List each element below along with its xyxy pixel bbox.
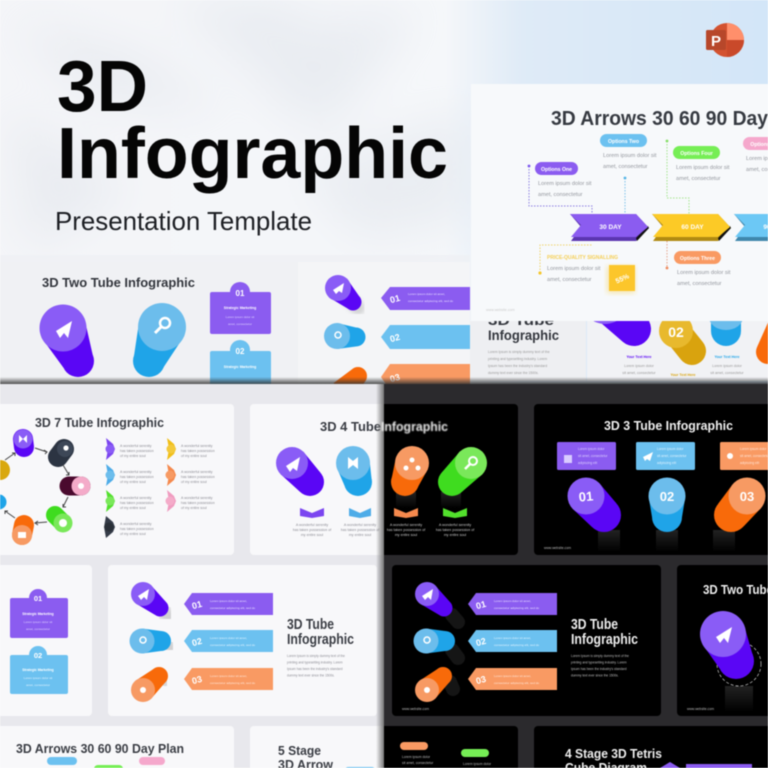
card 02 (10, 646, 68, 694)
quadrant: dark slides (381, 384, 768, 768)
title: Infographic (57, 114, 448, 194)
panel: dark arrows slide (384, 726, 518, 768)
heading: 3D Tube (287, 617, 334, 633)
tube: blue (133, 303, 186, 377)
arrow: 30 DAY (570, 214, 649, 241)
heading: 5 Stage (278, 743, 321, 758)
tube 02: 02 (660, 489, 674, 504)
panel: two tube cards (0, 565, 92, 716)
card 01: Lorem ipsum dolor sit (226, 315, 254, 319)
card 02: Lorem ipsum dolor sit (24, 676, 52, 680)
footer url: www.website.com (486, 308, 515, 312)
card 02: Strategic Marketing (22, 668, 54, 672)
panel: 3D 4 Tube dark half (381, 404, 518, 555)
bar 01: 01 (475, 599, 487, 611)
captions: my entire soul (349, 533, 371, 537)
box 2 (636, 442, 695, 470)
dashed ring (717, 642, 761, 686)
footer url: www.website.com (687, 707, 714, 711)
tube 03 (714, 478, 766, 532)
panel: 3D 7 Tube Infographic (0, 404, 234, 555)
captions: Your Text Here (626, 355, 652, 359)
bar 01 (184, 593, 273, 615)
captions (622, 355, 744, 377)
tube row 03 (415, 667, 452, 702)
paragraph: printing and typesetting industry. Lorem (287, 660, 343, 664)
box 1: Lorem ipsum dolor (578, 447, 605, 451)
bar 03: 03 (191, 674, 203, 686)
tube 01 (568, 478, 621, 532)
tube shadows (396, 492, 461, 508)
bar 02 (381, 325, 470, 349)
heading: 3D Two Tube Infographic (42, 276, 195, 290)
ribbons (300, 508, 371, 518)
arrow: 60 DAY: 60 DAY (681, 224, 704, 231)
bar 03: consectetur adipiscing elit, sed do (210, 681, 255, 685)
callouts: Lorem ipsum dolor (402, 755, 431, 759)
bar 02: consectetur adipiscing elit, sed do (494, 643, 539, 647)
paragraph (287, 654, 345, 678)
tube 03: 03 (740, 489, 754, 504)
bar 02 (468, 630, 557, 652)
tube row 03 (131, 667, 168, 702)
captions: has taken possession of (341, 528, 379, 532)
callout: Options Three: Lorem ipsum dolor sit (677, 270, 731, 276)
captions: has taken possession of (293, 528, 331, 532)
card 02 (209, 339, 272, 384)
callout: price quality signalling: 55% (615, 273, 631, 285)
callout: Options Three (674, 251, 731, 287)
legend text: of my entire soul (120, 454, 146, 458)
title: 3D (57, 47, 148, 127)
arrow: 30 DAY: 30 DAY (599, 224, 622, 231)
captions: my entire soul (301, 533, 323, 537)
card 01 (10, 589, 68, 638)
panel: 3D 4 Tube light half (250, 404, 390, 555)
card 01 (210, 282, 271, 334)
tube fragments: 02 (668, 324, 684, 340)
bar 01: consectetur adipiscing elit, sed do (408, 299, 453, 303)
panel: 3D Two Tube dark (677, 565, 768, 716)
legend text: of my entire soul (181, 506, 207, 510)
paragraph: printing and typesetting industry. Lorem (488, 357, 547, 361)
heading: 3D Tube (571, 617, 618, 633)
callout: price quality signalling: PRICE-QUALITY SIGNALLING (547, 255, 618, 261)
captions: my entire soul (395, 533, 417, 537)
bar 03: consectetur adipiscing elit, sed do (494, 681, 539, 685)
bar 02: 02 (389, 332, 401, 344)
paragraph: Lorem Ipsum is simply dummy text of the (488, 350, 550, 354)
slide: 3D two tube (top left) (38, 274, 471, 384)
legend text: has taken possession (181, 449, 215, 453)
tube (700, 611, 754, 679)
legend text: of my entire soul (181, 480, 207, 484)
box 1: sit amet, consectetur (578, 454, 608, 458)
legend text: of my entire soul (120, 532, 146, 536)
captions: A wonderful serenity (390, 523, 422, 527)
captions: Lorem ipsum dolor (712, 364, 743, 368)
callouts: Lorem ipsum dolor (463, 762, 492, 766)
bar 01: Lorem ipsum dolor sit amet, (210, 599, 247, 603)
bar 03: 03 (389, 372, 401, 384)
quadrant: light slides (0, 384, 390, 768)
bar 02 (184, 630, 273, 652)
captions: Your Text Here (714, 355, 740, 359)
callout: Options Four: Options Four (680, 151, 713, 157)
connectors (529, 141, 689, 273)
title (57, 47, 448, 194)
heading: 3D 3 Tube Infographic (604, 418, 733, 433)
card 01: amet, consectetur (26, 627, 50, 631)
captions: Your Text Here (670, 373, 696, 377)
heading (565, 746, 662, 768)
card 01: 01 (236, 289, 245, 298)
callouts (400, 742, 492, 766)
legend text: has taken possession (120, 501, 154, 505)
callout: price quality signalling (547, 255, 635, 293)
panel: 3D 3 Tube Infographic (534, 404, 768, 555)
panel: 3D Arrows 30 60 90 Day (471, 84, 768, 321)
callout: Options One: Options One (541, 167, 572, 173)
tube row 02 (414, 628, 455, 654)
box 2: Lorem ipsum dolor (657, 447, 684, 451)
card 01: Lorem ipsum dolor sit (24, 620, 52, 624)
paragraph: Ipsum has been the industry's standard (488, 364, 547, 368)
card 01: Strategic Marketing (224, 306, 256, 310)
card 02: 02 (236, 347, 245, 356)
bar 01: consectetur adipiscing elit, sed do (210, 606, 255, 610)
callout: price quality signalling: Lorem ipsum dolor sit (547, 266, 601, 272)
panel: 5 Stage 3D Arrow (250, 726, 390, 768)
callout: Options Two (600, 134, 657, 170)
tube ring (0, 430, 90, 545)
heading (287, 617, 354, 648)
callout: Options Four (673, 146, 730, 182)
legend text (120, 444, 215, 536)
bar 03 (468, 668, 557, 690)
heading: 3D Tube (488, 312, 554, 328)
callout: Options Four: amet, consectetur (676, 176, 721, 182)
callout: Options Three: Options Three (680, 256, 715, 262)
paragraph: Ipsum has been the industry's standard (571, 667, 627, 671)
box 2: adipiscing elit (657, 461, 676, 465)
card 02: amet, consectetur (26, 683, 50, 687)
footer url: www.website.com (402, 707, 429, 711)
bar 02: 02 (191, 636, 203, 648)
icon: PowerPoint logo (706, 23, 744, 57)
icon: PowerPoint logo: P (711, 33, 721, 50)
bar 01 (381, 287, 470, 310)
card 02: 02 (34, 651, 42, 660)
tube purple (276, 447, 324, 496)
bar 03: Lorem ipsum dolor sit amet, (494, 674, 531, 678)
paragraph: dummy text ever since the 1500s. (488, 371, 539, 375)
legend text: of my entire soul (181, 454, 207, 458)
legend text: has taken possession (181, 501, 215, 505)
bar 01: consectetur adipiscing elit, sed do (494, 606, 539, 610)
subtitle: Presentation Template (55, 206, 312, 236)
tube 01: 01 (578, 488, 594, 505)
tube row 01 (325, 275, 362, 310)
captions (293, 523, 379, 537)
legend text: A wonderful serenity (181, 444, 213, 448)
legend text: of my entire soul (120, 480, 146, 484)
captions: has taken possession of (436, 528, 474, 532)
legend text: has taken possession (120, 527, 154, 531)
captions: sit amet, consectetur (710, 371, 744, 375)
panel: 3D Tube Infographic dark (392, 565, 661, 716)
tube 02 (648, 478, 686, 532)
card 01: 01 (34, 594, 42, 603)
tube green (438, 447, 487, 496)
box 3: Lorem ipsum dolor (740, 447, 767, 451)
card 01: Strategic Marketing (22, 612, 54, 616)
heading: 3D Arrows 30 60 90 Day Plan (16, 742, 184, 756)
panel: 3D Tube Infographic light (108, 565, 377, 716)
bar 01: Lorem ipsum dolor sit amet, (408, 292, 445, 296)
paragraph: printing and typesetting industry. Lorem (571, 660, 627, 664)
legend text: A wonderful serenity (120, 522, 152, 526)
callout: Options One (535, 162, 592, 198)
paragraph (488, 350, 550, 375)
box 1 (557, 442, 616, 470)
heading: Infographic (488, 327, 559, 343)
top background with blurred leaf shadows (0, 0, 768, 385)
callouts: sit amet, consectetur (402, 761, 434, 765)
tube orange (391, 446, 429, 496)
bar 01: 01 (191, 599, 203, 611)
bar 02: Lorem ipsum dolor sit amet, (210, 636, 247, 640)
box 1: adipiscing elit (578, 461, 597, 465)
heading (488, 320, 560, 344)
captions: A wonderful serenity (296, 523, 328, 527)
legend text: A wonderful serenity (181, 496, 213, 500)
callout: Options One: amet, consectetur (538, 192, 583, 198)
heading: 4 Stage 3D Tetris (565, 746, 662, 761)
tube: purple (40, 304, 94, 377)
callout: Options Two: Lorem ipsum dolor sit (603, 153, 657, 159)
bar 02: 02 (475, 636, 487, 648)
bar 02: consectetur adipiscing elit, sed do (210, 643, 255, 647)
tube shadow (725, 686, 753, 712)
heading: 3D 4 Tube (320, 419, 381, 434)
bar 03 (380, 363, 471, 384)
legend text: A wonderful serenity (120, 444, 152, 448)
legend text: A wonderful serenity (120, 470, 152, 474)
seam shadow across the top half (0, 377, 768, 384)
bar 03: Lorem ipsum dolor sit amet, (210, 674, 247, 678)
ribbons (394, 508, 467, 518)
captions: sit amet, consectetur (622, 371, 656, 375)
callout: Options Two: Options Two (608, 139, 639, 145)
tube row 02 (130, 628, 171, 654)
captions: my entire soul (444, 533, 466, 537)
captions: A wonderful serenity (344, 523, 376, 527)
tube row 01 (415, 582, 452, 616)
box 2: sit amet, consectetur (657, 454, 687, 458)
bar 01: 01 (389, 293, 401, 305)
paragraph: Lorem Ipsum is simply dummy text of the (287, 654, 345, 658)
heading: Infographic (571, 632, 638, 648)
paragraph: Lorem Ipsum is simply dummy text of the (571, 654, 629, 658)
bar 03: 03 (475, 674, 487, 686)
bar 03 (184, 668, 273, 690)
pills (47, 757, 165, 768)
captions (387, 523, 474, 537)
bar 02: Lorem ipsum dolor sit amet, (494, 636, 531, 640)
legend text: has taken possession (120, 475, 154, 479)
panel: 3D Arrows plan (0, 726, 234, 768)
tube shadows (450, 615, 458, 689)
vertical seam shadow (376, 384, 384, 768)
callout: Options Four: Lorem ipsum dolor sit (676, 165, 730, 171)
arrow: 60 DAY (652, 214, 731, 241)
paragraph (571, 654, 629, 678)
tetris block (660, 762, 752, 768)
heading (278, 743, 334, 768)
tube row 03 (334, 366, 368, 384)
tube blue (336, 446, 372, 496)
callout: Options Three: amet, consectetur (677, 281, 722, 287)
arrow: 90 DAY (734, 214, 768, 241)
box 3: adipiscing elit (740, 461, 759, 465)
heading: 3D 7 Tube Infographic (35, 415, 164, 430)
slide: tube infographic behind arrows panel (487, 320, 768, 381)
bar 01: Lorem ipsum dolor sit amet, (494, 599, 531, 603)
paragraph: dummy text ever since the 1500s. (287, 674, 335, 678)
callout: Options One: Lorem ipsum dolor sit (538, 181, 592, 187)
legend ribbons (104, 438, 176, 538)
legend text: has taken possession (181, 475, 215, 479)
footer url: www.website.com (544, 546, 571, 550)
callout: Options Two: amet, consectetur (603, 164, 648, 170)
card 02: Strategic Marketing (224, 365, 256, 369)
tube shadows (598, 530, 735, 552)
heading (571, 617, 638, 648)
box 3 (720, 442, 768, 470)
legend text: A wonderful serenity (120, 496, 152, 500)
card 01: amet, consectetur (228, 322, 252, 326)
legend text: has taken possession (120, 449, 154, 453)
callout: Options Five (743, 137, 768, 173)
paragraph: dummy text ever since the 1500s. (571, 674, 619, 678)
captions: A wonderful serenity (439, 523, 471, 527)
captions: Lorem ipsum dolor (624, 364, 655, 368)
tube fragments (594, 320, 768, 366)
legend text: of my entire soul (120, 506, 146, 510)
legend text: A wonderful serenity (181, 470, 213, 474)
bar 01 (468, 593, 557, 615)
tube row 01 (131, 582, 168, 616)
paragraph: Ipsum has been the industry's standard (287, 667, 343, 671)
heading: Infographic (287, 632, 354, 648)
callout: price quality signalling: amet, consectetur (547, 277, 592, 283)
tube row 02 (324, 323, 366, 349)
panel: 4 Stage 3D Tetris (534, 726, 768, 768)
captions: has taken possession of (387, 528, 425, 532)
